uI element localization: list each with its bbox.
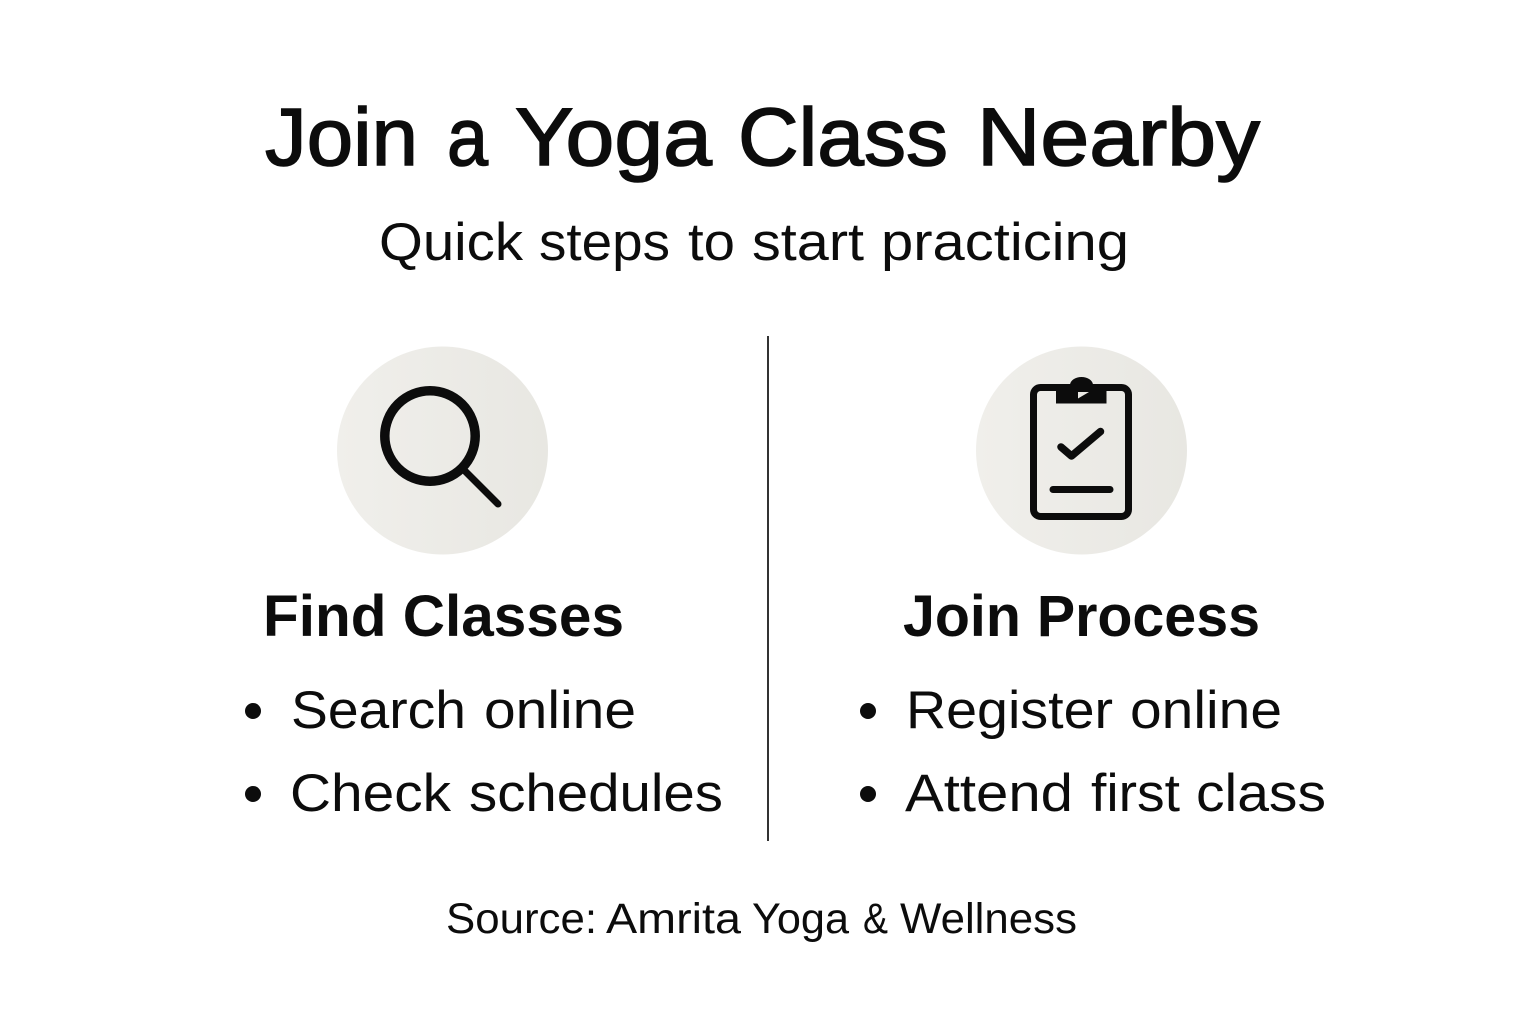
source note: Yoga (752, 895, 849, 943)
source note: Source: (446, 895, 597, 943)
list: join process: first (1091, 764, 1180, 823)
list: join process (860, 681, 1326, 823)
title: a (447, 92, 488, 183)
list: find classes: schedules (469, 764, 723, 823)
list: find classes: online (484, 681, 636, 740)
source note: & (863, 895, 888, 943)
list: find classes: Check (290, 764, 452, 823)
list: join process: Attend (905, 764, 1073, 823)
panel: find classes (245, 346, 723, 823)
list: join process: Register (906, 681, 1113, 740)
source note: Wellness (900, 895, 1077, 943)
subtitle: to (688, 213, 735, 272)
subtitle: start (752, 213, 864, 272)
icon: clipboard with checkmark (976, 346, 1187, 554)
source note: Amrita (606, 895, 741, 943)
heading: join process: Join Process (903, 584, 1260, 649)
subtitle: steps (539, 213, 670, 272)
list: find classes: Search (291, 681, 466, 740)
subtitle (379, 213, 1129, 272)
title: Join (265, 92, 418, 183)
vertical divider (767, 336, 769, 841)
heading: find classes: Find Classes (263, 584, 624, 649)
icon: magnifying glass (337, 346, 548, 554)
title: Yoga (515, 92, 712, 183)
list: join process: class (1196, 764, 1326, 823)
source note (446, 895, 1077, 943)
subtitle: Quick (379, 213, 524, 272)
subtitle: practicing (881, 213, 1129, 272)
list: join process: online (1130, 681, 1282, 740)
title: Nearby (977, 92, 1260, 183)
list: find classes (245, 681, 723, 823)
panel: join process (860, 346, 1326, 823)
title (265, 92, 1260, 183)
title: Class (738, 92, 948, 183)
